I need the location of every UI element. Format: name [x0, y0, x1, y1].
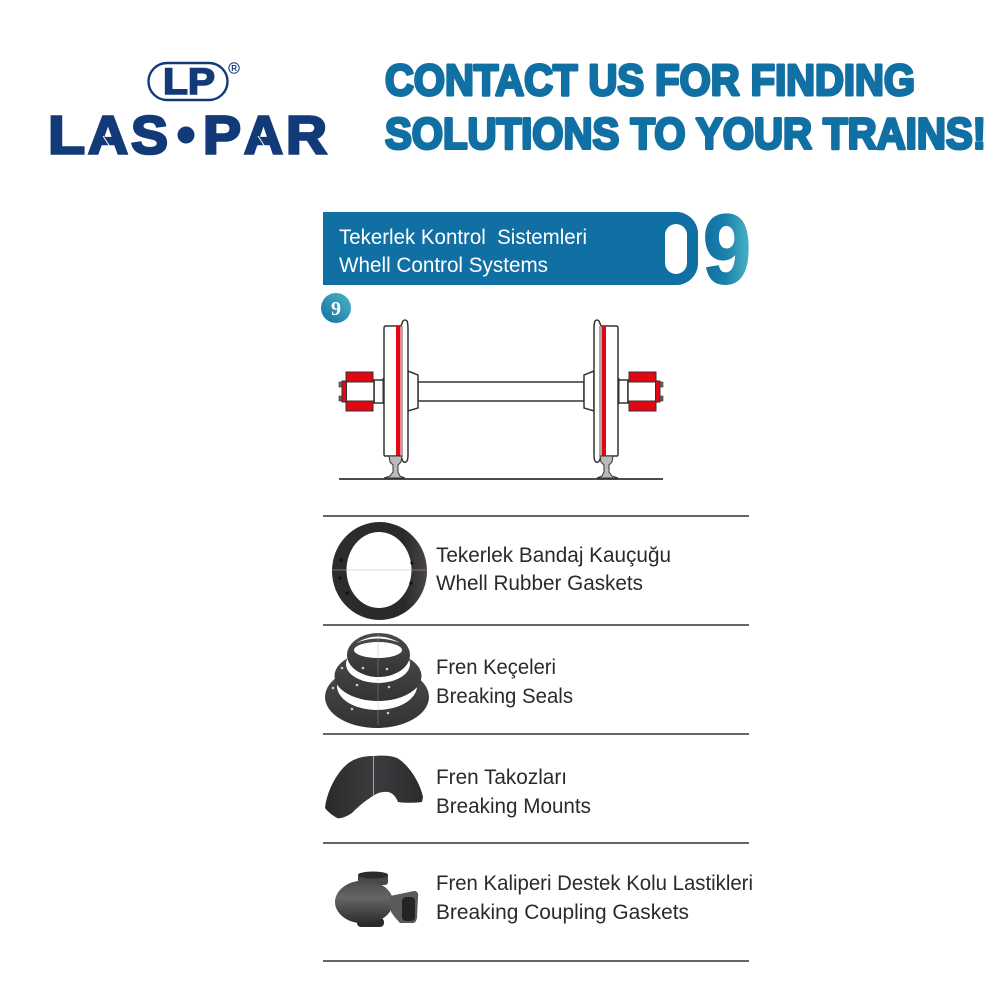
headline [385, 56, 986, 158]
label: breaking mounts: Breaking Mounts [436, 795, 591, 818]
label: wheel rubber gaskets: Whell Rubber Gaskets [436, 572, 643, 595]
label: wheel rubber gaskets: Tekerlek Bandaj Kauçuğu [436, 544, 671, 567]
label: breaking seals: Fren Keçeleri [436, 656, 556, 679]
banner title: Tekerlek Kontrol Sistemleri [339, 225, 587, 249]
number badge 9: 9 [331, 298, 341, 320]
logo: LAS-PAR [48, 61, 327, 166]
wheelset diagram [339, 320, 663, 479]
logo emblem: LP oval: LP [163, 61, 215, 102]
number badge 9 [321, 293, 351, 323]
logo wordmark: R [286, 106, 327, 166]
label: breaking seals: Breaking Seals [436, 685, 573, 708]
ground line [339, 478, 663, 480]
logo wordmark: P [203, 106, 241, 166]
logo emblem: LP oval: R [231, 64, 237, 73]
row: breaking seals [323, 625, 749, 728]
label: wheel rubber gaskets [436, 544, 671, 595]
axle [418, 382, 584, 401]
label: breaking coupling gaskets [436, 872, 753, 924]
label: breaking seals [436, 656, 573, 708]
banner title [339, 225, 587, 277]
row: breaking mounts [323, 734, 749, 818]
logo wordmark: S [131, 106, 168, 166]
row: breaking coupling gaskets [323, 843, 753, 927]
section number 09: 0 [654, 194, 698, 306]
photo: coupling gasket [335, 872, 418, 927]
left wheel assembly [339, 320, 418, 478]
logo wordmark: A [88, 106, 128, 166]
section number 09 [654, 194, 751, 306]
logo wordmark: A [244, 106, 283, 166]
label: breaking mounts: Fren Takozları [436, 766, 567, 789]
right wheel assembly [584, 320, 663, 478]
logo wordmark: L [48, 106, 85, 166]
section number 09: 9 [703, 194, 751, 304]
row: wheel rubber gaskets [323, 516, 749, 620]
label: breaking coupling gaskets: Fren Kaliperi Destek Kolu Lastikleri [436, 872, 753, 895]
logo emblem: LP oval [148, 61, 239, 102]
photo: brake mount [325, 756, 423, 818]
section banner [323, 194, 751, 306]
banner title: Whell Control Systems [339, 253, 548, 277]
label: breaking mounts [436, 766, 591, 818]
headline: CONTACT US FOR FINDING [385, 56, 915, 105]
logo wordmark [48, 106, 327, 166]
label: breaking coupling gaskets: Breaking Coupling Gaskets [436, 901, 689, 924]
photo: wheel rubber gasket ring [331, 522, 427, 620]
photo: stacked brake seal rings [325, 633, 429, 728]
